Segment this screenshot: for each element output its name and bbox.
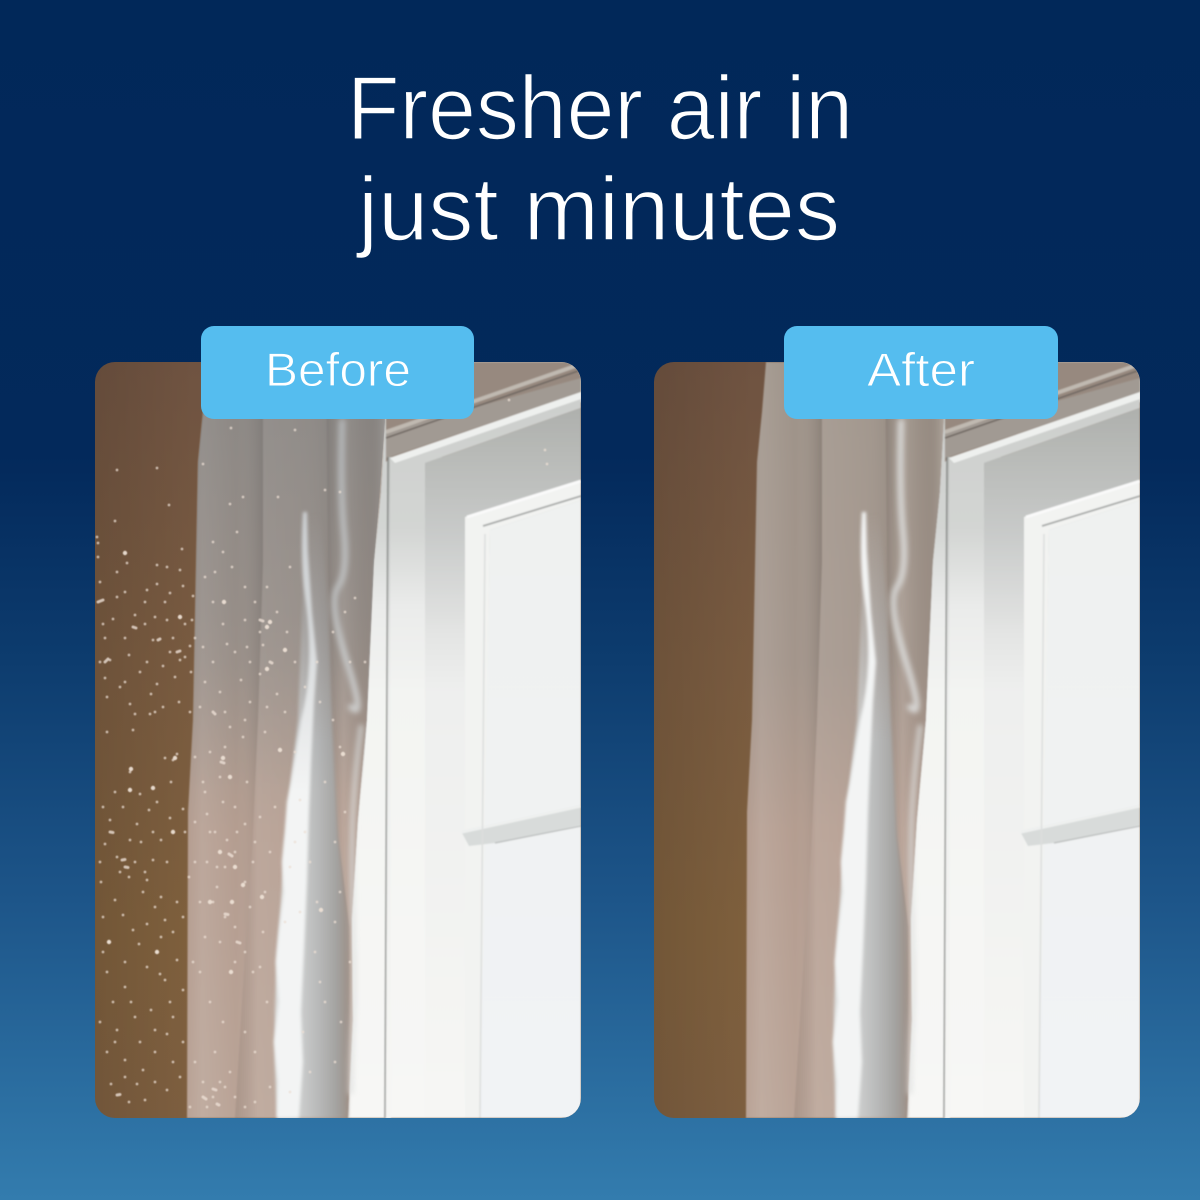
panel: after photo [654,362,1140,1118]
panel: before photo [95,362,581,1118]
title [347,59,853,260]
title: just minutes [355,160,840,260]
label: Before [201,326,474,419]
label: After: After [867,343,975,396]
label: After [784,326,1058,419]
dust particles [97,400,547,1107]
title: Fresher air in [347,59,853,159]
dust haze over curtain [194,414,385,746]
label: Before: Before [265,343,411,396]
